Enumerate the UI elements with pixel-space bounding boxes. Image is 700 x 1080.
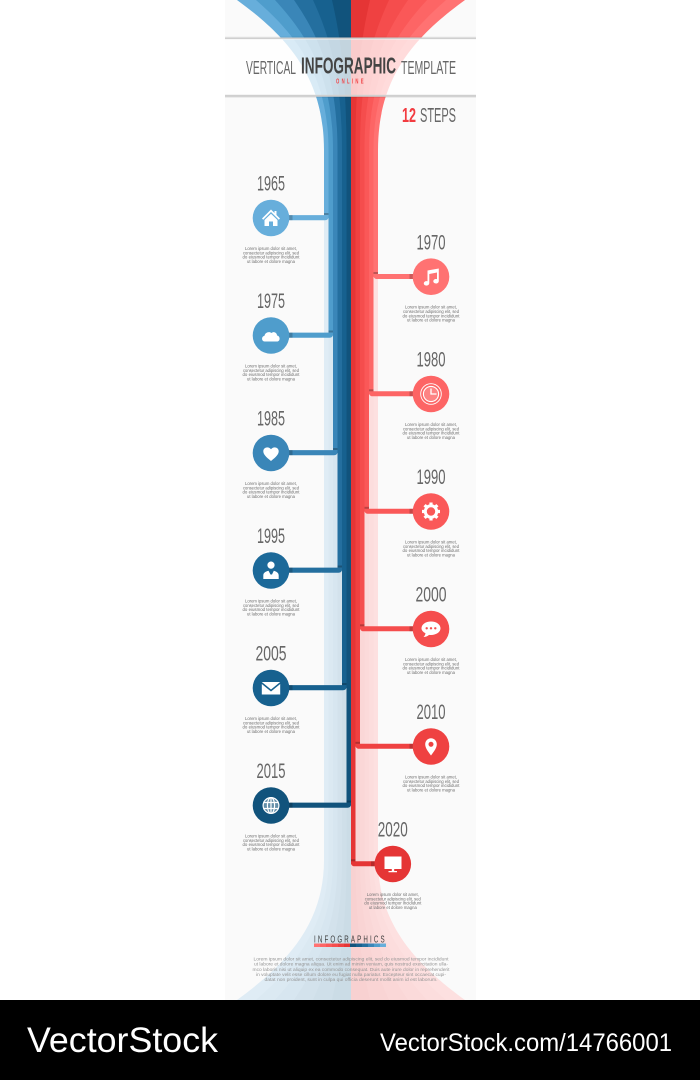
steps count <box>402 105 456 127</box>
step 1980: consectetur adipiscing elit, sed <box>403 426 459 431</box>
footer text: Lorem ipsum dolor sit amet, consectetur adipiscing elit, sed do eiusmod tempor incididunt <box>254 956 449 962</box>
footer text: ut labore et dolore magna aliqua. Ut enim ad minim veniam, quis nostrud exercitation ulla- <box>254 962 448 968</box>
step 1990 <box>364 465 460 558</box>
step 2000 <box>360 582 460 675</box>
solid ribbon: blue bands <box>237 0 351 806</box>
step 2000: consectetur adipiscing elit, sed <box>403 661 459 666</box>
footer text <box>252 956 450 983</box>
step 2010 <box>356 700 460 792</box>
step 2005: ut labore et dolore magna <box>247 729 295 734</box>
step 1985: consectetur adipiscing elit, sed <box>243 485 299 490</box>
step 1980: Lorem ipsum dolor sit amet, <box>405 422 457 427</box>
step 2010: do eiusmod tempor incididunt <box>402 783 460 788</box>
step 2020: ut labore et dolore magna <box>369 905 417 910</box>
step 2020: 2020 <box>378 818 408 842</box>
title <box>246 52 456 86</box>
title: TEMPLATE <box>401 58 456 78</box>
step 1995: Lorem ipsum dolor sit amet, <box>245 598 297 604</box>
step 1990: consectetur adipiscing elit, sed <box>403 544 459 549</box>
step 1970: ut labore et dolore magna <box>407 318 455 323</box>
footer heading: INFOGRAPHICS <box>314 933 387 945</box>
step 1985 <box>242 406 338 499</box>
step 1970: consectetur adipiscing elit, sed <box>403 309 459 314</box>
pale ribbon: red right <box>351 0 465 1000</box>
step 2015 <box>242 759 351 852</box>
step 1970 <box>374 230 460 323</box>
step 1970: 1970 <box>416 230 446 254</box>
step 1995: consectetur adipiscing elit, sed <box>243 603 299 608</box>
step 1965: do eiusmod tempor incididunt <box>242 255 300 260</box>
step 2015: ut labore et dolore magna <box>247 846 295 852</box>
step 1975: Lorem ipsum dolor sit amet, <box>245 364 297 368</box>
step 1985: Lorem ipsum dolor sit amet, <box>245 481 297 486</box>
step 1995: 1995 <box>257 524 285 548</box>
step 1965 <box>242 172 328 264</box>
step 1975 <box>242 289 333 382</box>
step 2005: Lorem ipsum dolor sit amet, <box>245 716 297 721</box>
footer text: mco laboris nisi ut aliquip ex ea commodo consequat. Duis aute irure dolor in reprehenderit <box>252 967 450 973</box>
step 2005: 2005 <box>256 642 287 666</box>
step 2000: 2000 <box>416 582 447 606</box>
step 2015: 2015 <box>256 759 286 783</box>
watermark bar: VectorStock.com/14766001 <box>380 1029 672 1057</box>
footer text: datat non proident, sunt in culpa qui officia deserunt mollit anim id est laborum. <box>264 977 438 983</box>
step 1995: do eiusmod tempor incididunt <box>242 607 300 612</box>
step 1980 <box>369 348 460 440</box>
step 1965: ut labore et dolore magna <box>247 259 295 264</box>
step 1985: 1985 <box>257 406 285 430</box>
step 2010: 2010 <box>416 700 446 724</box>
step 2005: do eiusmod tempor incididunt <box>242 725 300 730</box>
step 2005 <box>242 642 346 734</box>
step 2000: ut labore et dolore magna <box>407 670 455 675</box>
step 1975: ut labore et dolore magna <box>247 376 295 382</box>
step 2015: do eiusmod tempor incididunt <box>242 842 300 847</box>
step 1990: 1990 <box>416 465 446 489</box>
step 1975: do eiusmod tempor incididunt <box>242 372 300 377</box>
step 1990: do eiusmod tempor incididunt <box>402 548 460 553</box>
watermark bar: VectorStock <box>27 1021 219 1060</box>
step 1980: ut labore et dolore magna <box>407 435 455 440</box>
step 2005: consectetur adipiscing elit, sed <box>243 720 299 725</box>
step 1985: do eiusmod tempor incididunt <box>242 490 300 495</box>
panel: background <box>225 0 476 1000</box>
step 1965: 1965 <box>257 172 285 196</box>
step 1980: 1980 <box>416 348 446 372</box>
footer text: in voluptate velit esse cillum dolore eu fugiat nulla pariatur. Excepteur sint occaecat cupi- <box>256 972 446 978</box>
watermark bar <box>0 1000 700 1080</box>
step 2015: Lorem ipsum dolor sit amet, <box>245 834 297 838</box>
steps count: 12 <box>402 105 416 127</box>
title: ONLINE <box>336 78 366 86</box>
step 1970: Lorem ipsum dolor sit amet, <box>405 305 457 310</box>
step 2020: consectetur adipiscing elit, sed <box>365 896 421 901</box>
step 2020 <box>351 818 422 910</box>
step 1965: Lorem ipsum dolor sit amet, <box>245 246 297 251</box>
solid ribbon: red bands <box>351 0 465 864</box>
step 2020: Lorem ipsum dolor sit amet, <box>367 892 419 897</box>
step 2010: Lorem ipsum dolor sit amet, <box>405 774 457 780</box>
step 1965: consectetur adipiscing elit, sed <box>243 250 299 255</box>
step 1995: ut labore et dolore magna <box>247 612 295 616</box>
step 2010: ut labore et dolore magna <box>407 788 455 792</box>
step 1975: consectetur adipiscing elit, sed <box>243 368 299 373</box>
step 1985: ut labore et dolore magna <box>247 494 295 499</box>
step 1990: Lorem ipsum dolor sit amet, <box>405 540 457 544</box>
step 2020: do eiusmod tempor incididunt <box>364 901 422 906</box>
pale ribbon: blue left <box>237 0 351 1000</box>
title: VERTICAL <box>246 58 296 78</box>
step 1970: do eiusmod tempor incididunt <box>402 313 460 318</box>
step 1975: 1975 <box>257 289 285 313</box>
step 1995 <box>242 524 342 616</box>
step 1980: do eiusmod tempor incididunt <box>402 431 460 436</box>
steps count: STEPS <box>420 105 456 127</box>
step 2000: do eiusmod tempor incididunt <box>402 666 460 671</box>
step 2015: consectetur adipiscing elit, sed <box>243 838 299 843</box>
title: INFOGRAPHIC <box>301 52 396 78</box>
title band <box>225 36 476 98</box>
step 1990: ut labore et dolore magna <box>407 552 455 558</box>
step 2010: consectetur adipiscing elit, sed <box>403 779 459 784</box>
step 2000: Lorem ipsum dolor sit amet, <box>405 657 457 662</box>
